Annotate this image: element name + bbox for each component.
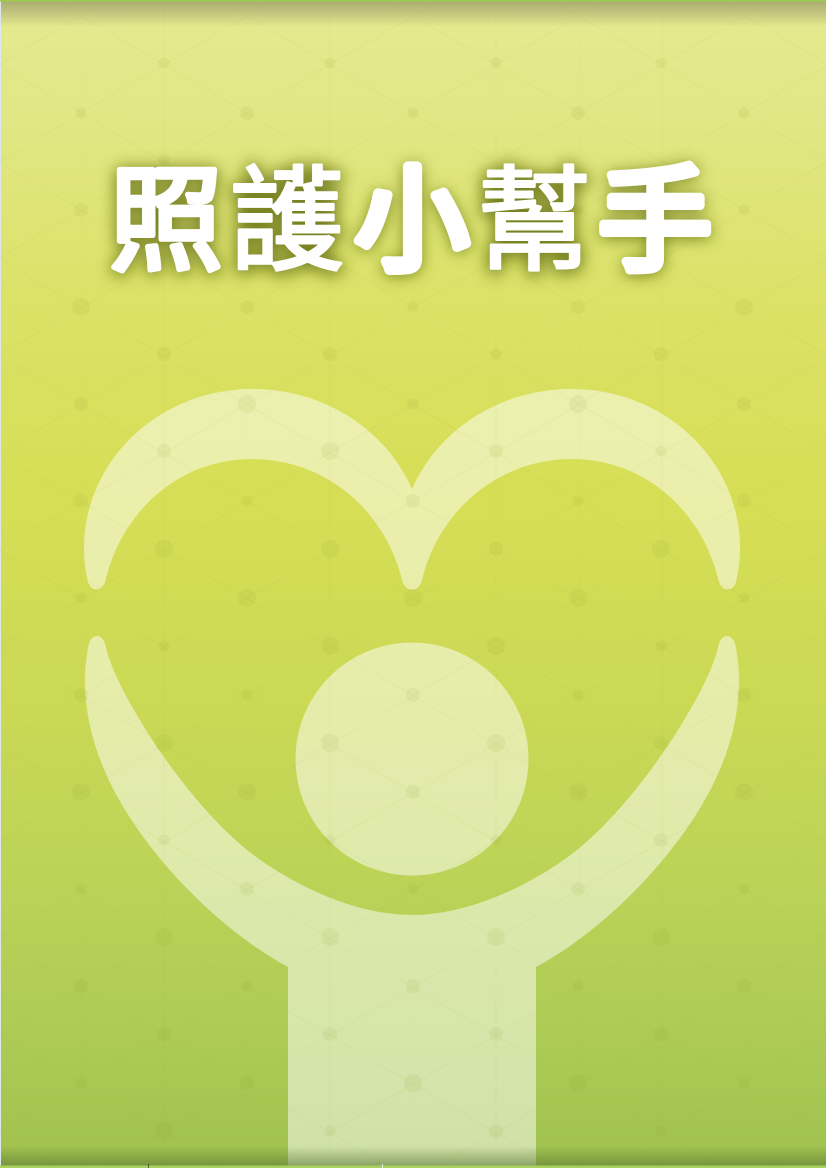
title	[109, 129, 712, 296]
title shadow: 幫	[477, 131, 591, 296]
heart: upper crescents	[84, 389, 740, 590]
figure: person with heart-shaped arms	[84, 389, 740, 1166]
title shadow: 手	[598, 131, 712, 296]
head	[296, 642, 528, 876]
title text: 小	[355, 129, 469, 294]
title text	[109, 129, 712, 294]
title text: 照	[109, 129, 223, 294]
title shadow: 護	[230, 131, 344, 296]
title text: 手	[598, 129, 712, 294]
title text: 護	[230, 129, 344, 294]
title shadow: 照	[109, 131, 223, 296]
title shadow	[109, 131, 712, 296]
body: raised arms and torso	[85, 636, 739, 1166]
title text: 幫	[477, 129, 591, 294]
title shadow: 小	[355, 131, 469, 296]
